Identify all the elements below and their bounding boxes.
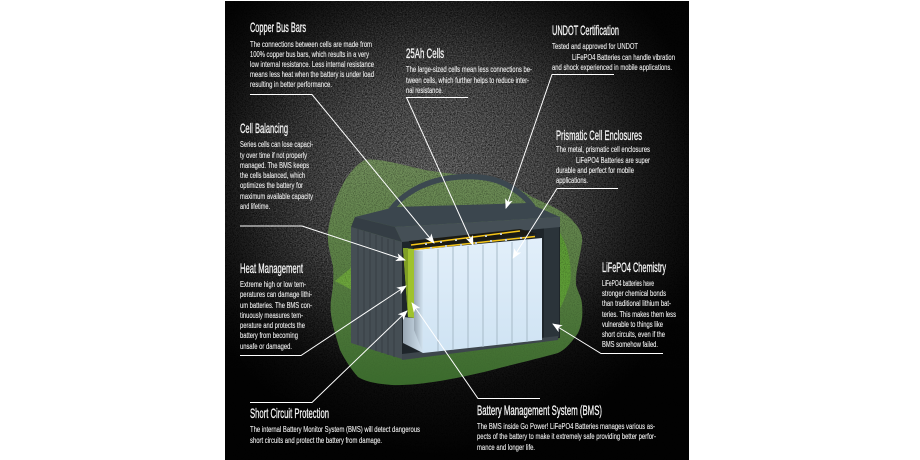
callout: Heat Management: um batteries. The BMS con- <box>240 300 312 310</box>
callout: Short Circuit Protection <box>250 311 420 445</box>
callout: UNDOT Certification <box>506 22 675 208</box>
cells <box>414 238 542 353</box>
battery interior <box>402 225 560 359</box>
callout: Copper Bus Bars <box>250 19 434 243</box>
callout: UNDOT Certification: and shock experienced in mobile applications. <box>552 62 672 72</box>
bottom lip <box>402 336 558 360</box>
callout: Cell Balancing: optimizes the battery for <box>240 180 303 190</box>
callout: Heat Management: Extreme high or low tem- <box>240 279 306 289</box>
callout: Short Circuit Protection: Short Circuit Protection <box>250 405 329 421</box>
callout: LiFePO4 Chemistry <box>553 259 676 354</box>
callout: LiFePO4 Chemistry: LiFePO4 batteries have <box>602 278 654 288</box>
callout: Battery Management System: The BMS inside Go Power! LiFePO4 Batteries manages various as- <box>477 421 655 431</box>
bus bars <box>409 229 537 250</box>
BMS shelf <box>403 317 423 353</box>
callout: 25Ah Cells: tween cells, which further helps to reduce inter- <box>406 75 529 85</box>
callout: Copper Bus Bars: 100% copper bus bars, which results in a very <box>250 49 369 59</box>
callout: Cell Balancing: managed. The BMS keeps <box>240 160 309 170</box>
callout: Heat Management: tinuously measures tem- <box>240 310 303 320</box>
callout: Copper Bus Bars: resulting in better performance. <box>250 79 332 89</box>
lid front <box>395 217 560 242</box>
callout: Prismatic Cell Enclosures: applications. <box>556 175 588 185</box>
callout: Battery Management System <box>412 303 656 452</box>
lid top <box>355 203 560 227</box>
green blob behind battery <box>328 160 582 386</box>
callout: Cell Balancing: Cell Balancing <box>240 120 288 136</box>
green circuit board <box>403 248 414 318</box>
callout: LiFePO4 Chemistry: vulnerable to things like <box>602 319 663 329</box>
callout: Cell Balancing: and lifetime. <box>240 201 270 211</box>
callout: Heat Management <box>240 260 406 356</box>
callout: Copper Bus Bars: means less heat when the battery is under load <box>250 69 374 79</box>
callout: Battery Management System: pects of the battery to make it extremely safe providing better perfor- <box>477 431 656 441</box>
callout: Prismatic Cell Enclosures: durable and perfect for mobile <box>556 165 634 175</box>
callout: Cell Balancing: the cells balanced, which <box>240 170 305 180</box>
callout: UNDOT Certification: LiFePO4 Batteries can handle vibration <box>572 52 675 62</box>
callout: Heat Management: perature and protects the <box>240 320 305 330</box>
callout: Heat Management: unsafe or damaged. <box>240 341 292 351</box>
callout: Cell Balancing: ty over time if not properly <box>240 150 307 160</box>
callout: 25Ah Cells: nal resistance. <box>406 85 443 95</box>
background panel <box>225 1 689 460</box>
callout: Cell Balancing: Series cells can lose capaci- <box>240 139 313 149</box>
callout: Cell Balancing: maximum available capacity <box>240 191 313 201</box>
callout: Copper Bus Bars: low internal resistance. Less internal resistance <box>250 59 374 69</box>
callout: LiFePO4 Chemistry: teries. This makes them less <box>602 309 676 319</box>
lid left side <box>351 217 402 242</box>
callout: 25Ah Cells <box>406 45 532 245</box>
callout: Prismatic Cell Enclosures: LiFePO4 Batteries are super <box>576 155 650 165</box>
callout: LiFePO4 Chemistry: stronger chemical bonds <box>602 288 666 298</box>
callout: Prismatic Cell Enclosures: The metal, prismatic cell enclosures <box>556 144 650 154</box>
callout: Copper Bus Bars: Copper Bus Bars <box>250 19 306 35</box>
callout: Battery Management System: mance and longer life. <box>477 442 535 452</box>
callout: LiFePO4 Chemistry: BMS somehow failed. <box>602 339 658 349</box>
right wall <box>544 226 559 339</box>
callout: UNDOT Certification: Tested and approved for UNDOT <box>552 41 639 51</box>
battery <box>351 177 560 360</box>
callout: Heat Management: Heat Management <box>240 260 303 276</box>
callout: UNDOT Certification: UNDOT Certification <box>552 22 619 38</box>
callout: Short Circuit Protection: short circuits and protect the battery from damage. <box>250 435 382 445</box>
callout: LiFePO4 Chemistry: LiFePO4 Chemistry <box>602 259 666 275</box>
callout: Battery Management System: Battery Management System (BMS) <box>477 402 602 418</box>
callout: Prismatic Cell Enclosures <box>513 127 650 258</box>
handle <box>385 177 533 222</box>
callout: Heat Management: peratures can damage lithi- <box>240 289 312 299</box>
callout: Prismatic Cell Enclosures: Prismatic Cell Enclosures <box>556 127 642 143</box>
left side wall <box>351 227 402 359</box>
callout: Short Circuit Protection: The internal Battery Monitor System (BMS) will detect dangerous <box>250 424 420 434</box>
callout: LiFePO4 Chemistry: than traditional lithium bat- <box>602 298 671 308</box>
callout: 25Ah Cells: The large-sized cells mean less connections be- <box>406 64 532 74</box>
callout: Copper Bus Bars: The connections between cells are made from <box>250 39 372 49</box>
callout: Cell Balancing <box>240 120 405 260</box>
callout: 25Ah Cells: 25Ah Cells <box>406 45 444 61</box>
callout: Heat Management: battery from becoming <box>240 330 298 340</box>
callout: LiFePO4 Chemistry: short circuits, even if the <box>602 329 665 339</box>
